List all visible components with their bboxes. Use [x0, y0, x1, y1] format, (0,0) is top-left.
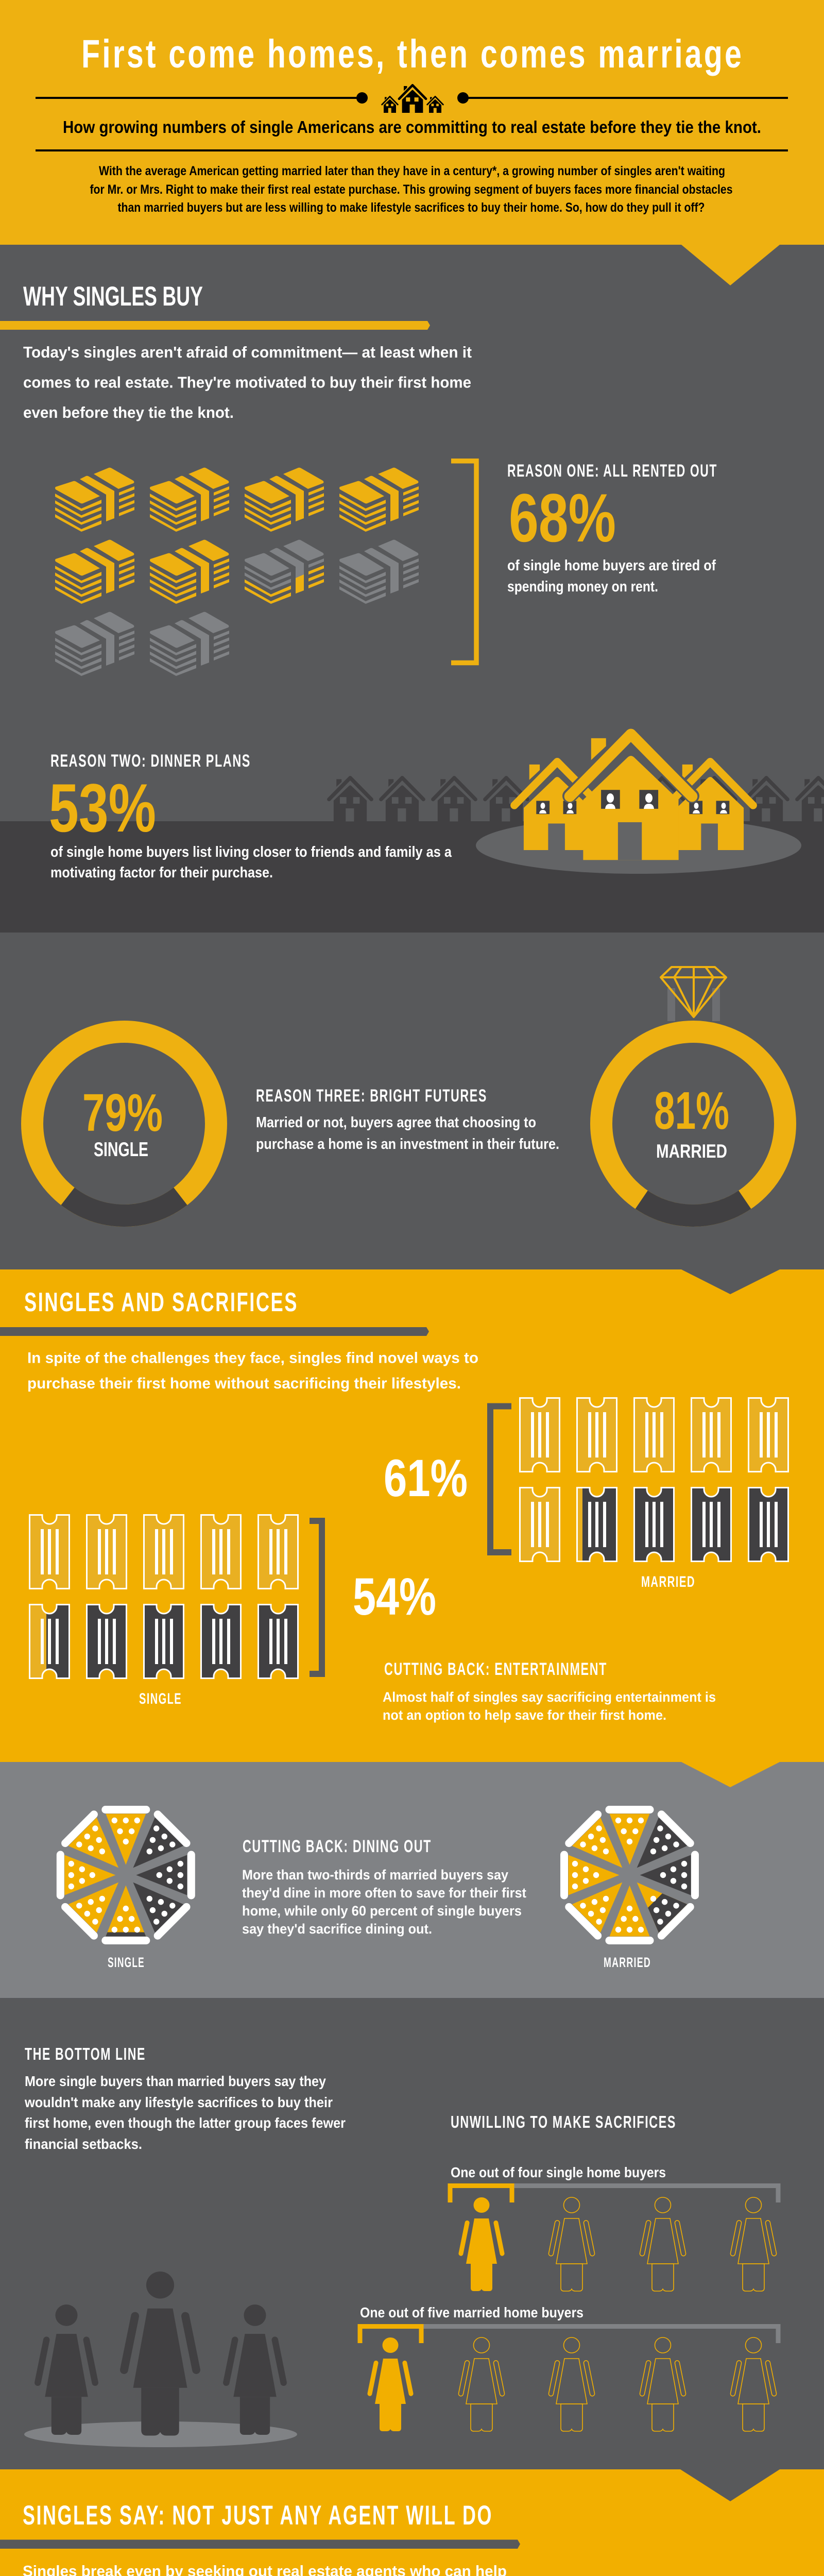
text: cutting back dining out: say they'd sacrifice dining out.: [242, 1921, 432, 1937]
text: reason one: [507, 461, 717, 595]
text: reason one: of single home buyers are tired of: [507, 557, 716, 574]
chart: one out of five married buyers: One out of five married home buyers: [360, 2304, 583, 2320]
icon: pizza single: [60, 1809, 191, 1940]
text: cutting back entertainment: Almost half of singles say sacrificing entertainment is: [383, 1689, 716, 1705]
heading: singles and sacrifices: SINGLES AND SACRIFICES: [24, 1287, 298, 1317]
illustration: three people on spot: [24, 2272, 297, 2447]
text: sacrifices intro: purchase their first home without sacrificing their lifestyles.: [27, 1375, 461, 1392]
text: the bottom line: financial setbacks.: [25, 2136, 142, 2152]
text: cutting back entertainment: CUTTING BACK: ENTERTAINMENT: [384, 1659, 607, 1679]
heading: not just any agent: SINGLES SAY: NOT JUST ANY AGENT WILL DO: [23, 2500, 493, 2531]
text: reason two: REASON TWO: DINNER PLANS: [50, 751, 251, 771]
text: sacrifices intro: [27, 1349, 478, 1392]
arrow: section pointer grey: [680, 2469, 780, 2501]
dark row of houses: [329, 778, 824, 821]
text: reason three: [256, 1086, 559, 1153]
chart: 81% married ring: 81%: [654, 1081, 729, 1140]
arrow: section pointer yellow: [681, 1762, 780, 1787]
text: cutting back entertainment: [383, 1659, 716, 1723]
stat: 53%: 53%: [49, 770, 156, 846]
heading: singles and sacrifices: [0, 1287, 429, 1336]
chart: 81% married ring: [602, 1031, 785, 1216]
bracket: reason one: [451, 461, 476, 663]
text: cutting back dining out: [242, 1837, 526, 1937]
text: reason one: spending money on rent.: [507, 579, 658, 595]
chart: one out of five married buyers: [360, 2304, 778, 2431]
text: why singles buy intro: Today's singles aren't afraid of commitment— at least when it: [23, 343, 472, 361]
text: reason three: REASON THREE: BRIGHT FUTURES: [256, 1086, 487, 1106]
chart: 79% single ring: 79%: [82, 1083, 163, 1142]
label: pizza single: SINGLE: [108, 1955, 145, 1970]
chart: 81% married ring: MARRIED: [656, 1141, 727, 1162]
text: the bottom line: [24, 2044, 346, 2152]
icon: pizza married: [564, 1809, 695, 1940]
side house left: [514, 761, 600, 850]
arrow: section pointer grey: [681, 1269, 780, 1294]
side house right: [667, 761, 753, 850]
text: cutting back dining out: CUTTING BACK: DINING OUT: [243, 1837, 432, 1856]
text: why singles buy intro: [23, 343, 472, 421]
label: pizza married: MARRIED: [604, 1955, 651, 1970]
text: the bottom line: first home, even though the latter group faces fewer: [25, 2115, 346, 2131]
text: reason two: of single home buyers list living closer to friends and family as a: [50, 844, 452, 860]
chart: married tickets 61 percent: MARRIED: [641, 1573, 695, 1590]
text: cutting back entertainment: not an option to help save for their first home.: [383, 1707, 666, 1723]
heading: why singles buy: WHY SINGLES BUY: [23, 281, 203, 312]
text: the bottom line: THE BOTTOM LINE: [25, 2044, 146, 2063]
heading: why singles buy: [0, 281, 430, 330]
panel: header: [0, 0, 824, 245]
text: reason three: Married or not, buyers agree that choosing to: [256, 1114, 536, 1131]
heading: not just any agent: [0, 2500, 520, 2549]
centre house: [570, 734, 692, 860]
chart: single tickets 54 percent: [30, 1515, 436, 1707]
text: the bottom line: wouldn't make any lifestyle sacrifices to buy their: [24, 2094, 333, 2110]
text: why singles buy intro: even before they tie the knot.: [23, 403, 234, 421]
stat: 61%: 61%: [384, 1449, 468, 1507]
intro text: With the average American getting married later than they have in a century*, a growing number of singles aren't waiting: [99, 164, 725, 178]
icon: three houses with divider: [36, 85, 788, 113]
arrow: header pointer: [681, 245, 780, 285]
text: reason one: REASON ONE: ALL RENTED OUT: [507, 461, 717, 481]
chart: 79% single ring: SINGLE: [94, 1139, 148, 1161]
heading: unwilling to make sacrifices: UNWILLING TO MAKE SACRIFICES: [451, 2112, 676, 2131]
text: cutting back dining out: More than two-thirds of married buyers say: [242, 1867, 508, 1883]
intro text: than married buyers but are less willing to make lifestyle sacrifices to buy their home. So, how do they pull it off?: [117, 200, 705, 215]
chart: married tickets 61 percent: [384, 1398, 788, 1590]
chart: one out of four single buyers: One out of four single home buyers: [451, 2164, 666, 2180]
chart: money stacks 68 percent: [55, 468, 419, 676]
chart: single tickets 54 percent: SINGLE: [139, 1690, 182, 1707]
illustration: neighbourhood houses: [329, 734, 824, 874]
icon: diamond ring prongs: [661, 967, 726, 1021]
text: reason two: [49, 751, 452, 881]
intro text: [90, 164, 732, 215]
text: sacrifices intro: In spite of the challenges they face, singles find novel ways to: [27, 1349, 478, 1366]
text: the bottom line: More single buyers than married buyers say they: [25, 2073, 326, 2089]
text: cutting back dining out: they'd dine in more often to save for their first: [242, 1885, 526, 1901]
stat: 68%: 68%: [509, 480, 616, 556]
text: cutting back dining out: home, while only 60 percent of single buyers: [242, 1903, 522, 1919]
stat: 54%: 54%: [353, 1567, 436, 1626]
text: reason three: purchase a home is an investment in their future.: [256, 1136, 559, 1153]
chart: 79% single ring: [32, 1031, 216, 1216]
text: reason two: motivating factor for their purchase.: [50, 865, 273, 881]
subtitle: How growing numbers of single Americans are committing to real estate before they tie the knot.: [63, 117, 761, 137]
chart: one out of four single buyers: [450, 2164, 778, 2291]
text: why singles buy intro: comes to real estate. They're motivated to buy their first home: [23, 373, 471, 392]
